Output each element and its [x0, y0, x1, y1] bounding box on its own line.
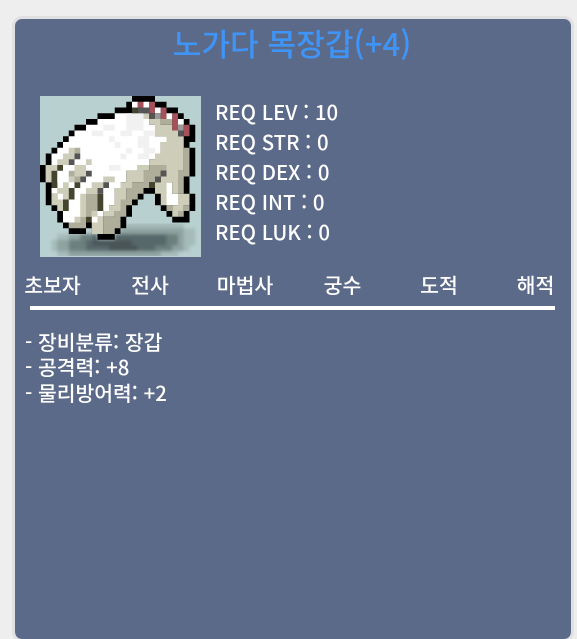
requirement: level: REQ LEV : 10 [215, 96, 338, 126]
class: warrior: 전사 [131, 269, 169, 299]
class: pirate: 해적 [517, 269, 554, 299]
requirement: intelligence: REQ INT : 0 [215, 186, 325, 216]
description: attack: - 공격력: +8 [25, 351, 129, 381]
class: beginner: 초보자 [24, 269, 81, 299]
requirement: strength: REQ STR : 0 [215, 126, 329, 156]
class: magician: 마법사 [217, 269, 273, 299]
class: archer: 궁수 [324, 269, 361, 299]
title: 노가다 목장갑(+4) [173, 20, 411, 65]
class tabs [24, 269, 554, 299]
class: thief: 도적 [420, 269, 458, 299]
icon: white work glove pixel art [40, 96, 201, 257]
description: category: - 장비분류: 장갑 [25, 326, 162, 356]
item description [25, 326, 167, 407]
requirements list [215, 96, 338, 246]
divider rule [30, 306, 555, 310]
description: defense: - 물리방어력: +2 [25, 377, 167, 407]
requirement: dexterity: REQ DEX : 0 [215, 156, 329, 186]
requirement: luck: REQ LUK : 0 [215, 216, 330, 246]
